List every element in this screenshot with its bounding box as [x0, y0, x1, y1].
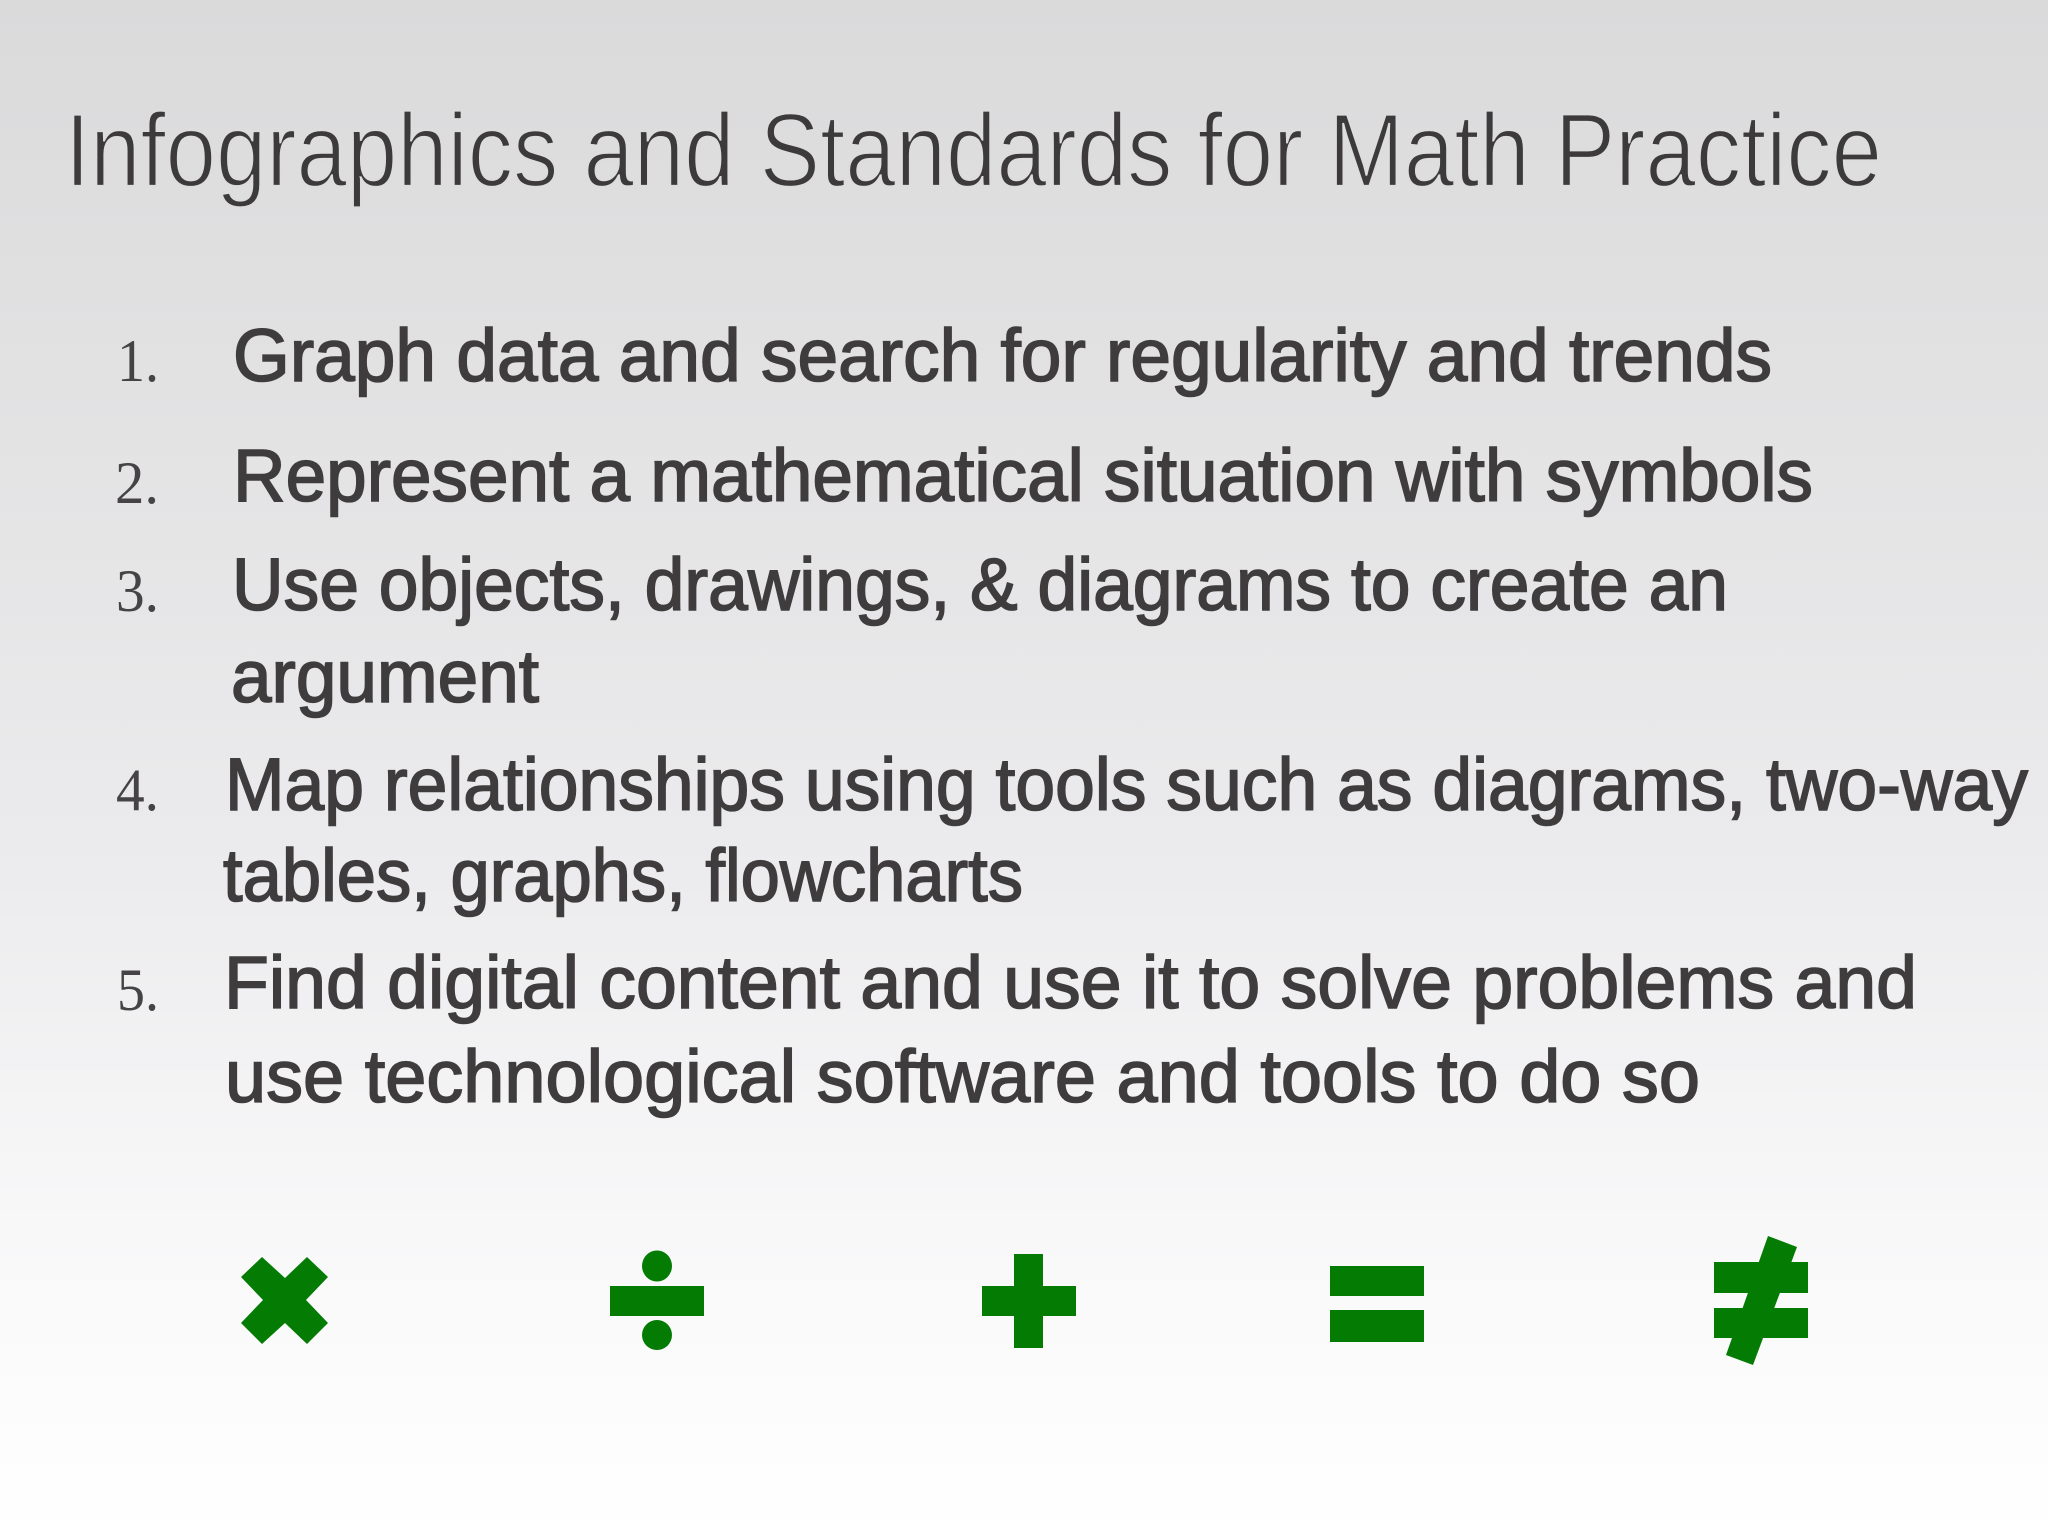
item 4: tables, graphs, flowcharts — [223, 834, 1023, 917]
item 3: Use objects, drawings, & diagrams to create an — [232, 543, 1728, 626]
item 5: use technological software and tools to do so — [225, 1035, 1700, 1118]
item 2: Represent a mathematical situation with symbols — [233, 434, 1813, 517]
item 4: 4. — [116, 757, 159, 823]
item 5 — [117, 941, 1917, 1118]
icon: not equal — [1714, 1236, 1808, 1365]
item 3: argument — [231, 635, 539, 718]
icon: plus — [982, 1254, 1076, 1348]
icon: equals — [1330, 1266, 1424, 1342]
item 4 — [116, 743, 2028, 917]
item 3 — [116, 543, 1728, 718]
item 1: Graph data and search for regularity and trends — [233, 314, 1772, 397]
item 2: 2. — [115, 450, 159, 516]
icon: divide — [610, 1250, 704, 1350]
item 4: Map relationships using tools such as diagrams, two-way — [225, 743, 2028, 826]
item 1: 1. — [117, 328, 159, 394]
icon: multiply — [241, 1257, 328, 1344]
item 5: 5. — [117, 957, 159, 1023]
item 3: 3. — [116, 558, 159, 624]
math symbols row — [241, 1236, 1808, 1365]
list of practices — [115, 314, 2028, 1118]
item 5: Find digital content and use it to solve problems and — [224, 941, 1917, 1024]
